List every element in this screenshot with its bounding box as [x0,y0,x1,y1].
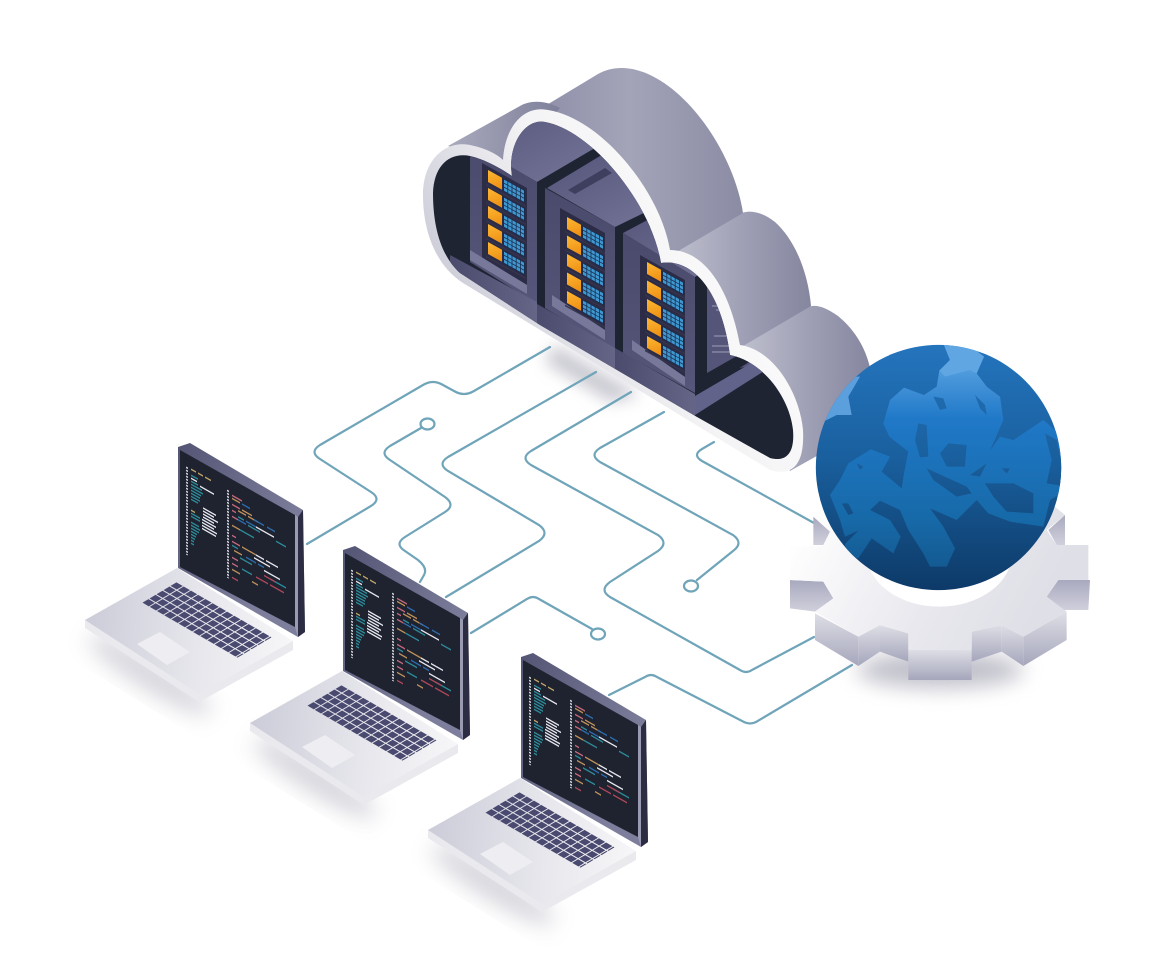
gear and globe [790,343,1090,688]
gear top face [790,500,1088,650]
cloud back extrusion: right lobe [738,306,872,471]
globe [813,343,1067,590]
isometric illustration [85,68,1090,930]
gear centre opening [867,500,1012,607]
cloud back extrusion: main lobe [535,68,743,257]
cloud with server racks [423,68,872,480]
laptop 2 [247,546,470,828]
server room interior [433,122,794,459]
cloud back extrusion: left lobe [448,102,560,165]
server rack 2 [537,156,650,369]
server rack 3 [615,220,762,416]
cloud front rim [423,109,803,472]
gear shadow [857,652,1023,688]
shadow under cloud [545,345,640,402]
network connection lines [307,347,852,724]
cloud back extrusion: middle lobe [668,212,811,349]
gear side faces [790,515,1090,680]
laptop 3 [425,653,648,935]
laptop 1 [82,443,305,725]
server rack 1 [450,122,610,323]
